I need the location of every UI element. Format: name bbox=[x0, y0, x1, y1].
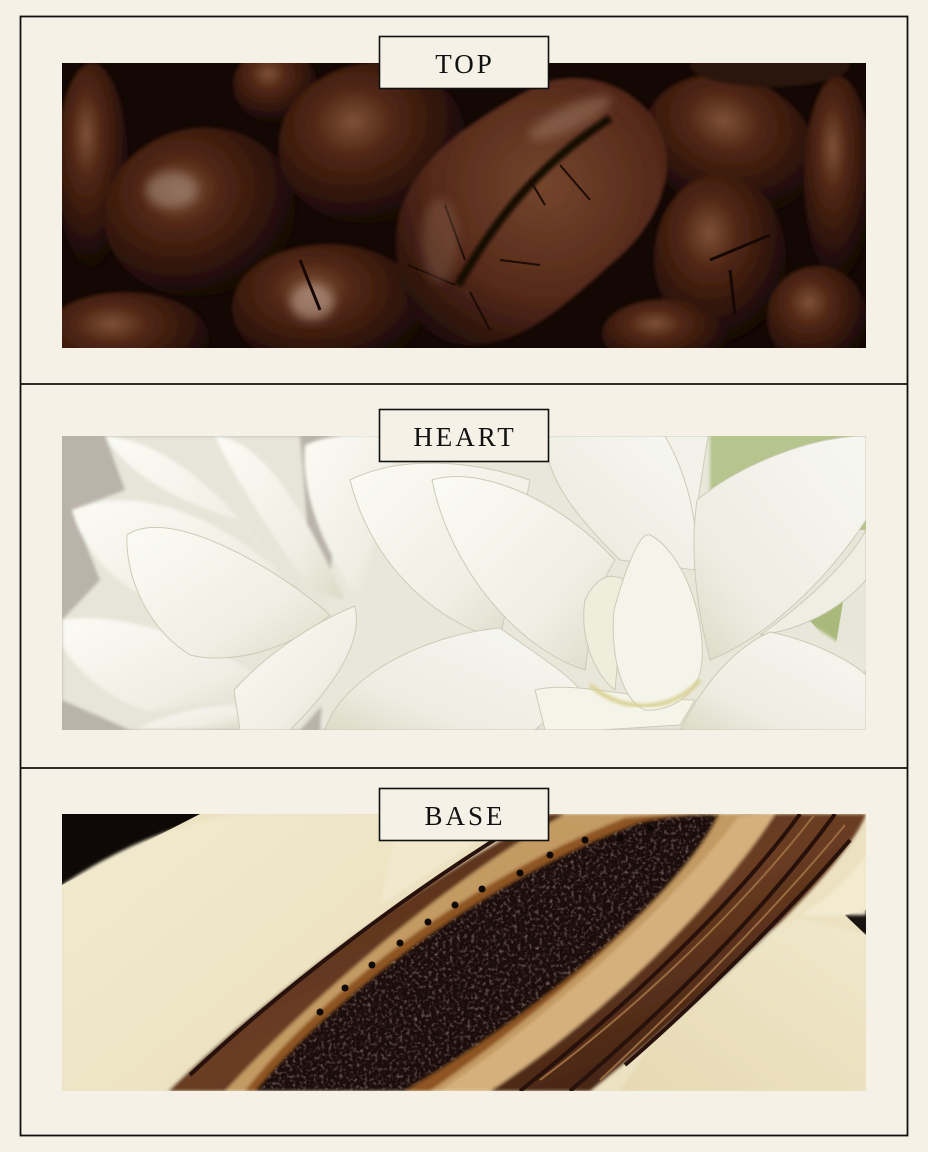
label: BASE bbox=[380, 788, 548, 840]
label: TOP: TOP bbox=[435, 49, 495, 79]
label: BASE: BASE bbox=[424, 801, 506, 831]
photo: white tuberose flower bbox=[62, 435, 866, 730]
panel: heart notes bbox=[62, 410, 866, 730]
photo: split vanilla pod bbox=[62, 814, 866, 1091]
label: TOP bbox=[380, 36, 548, 88]
label: HEART: HEART bbox=[413, 422, 517, 452]
panel: top notes bbox=[62, 36, 866, 348]
label: HEART bbox=[380, 410, 548, 462]
photo: roasted coffee beans bbox=[62, 63, 866, 348]
panel: base notes bbox=[62, 788, 866, 1091]
